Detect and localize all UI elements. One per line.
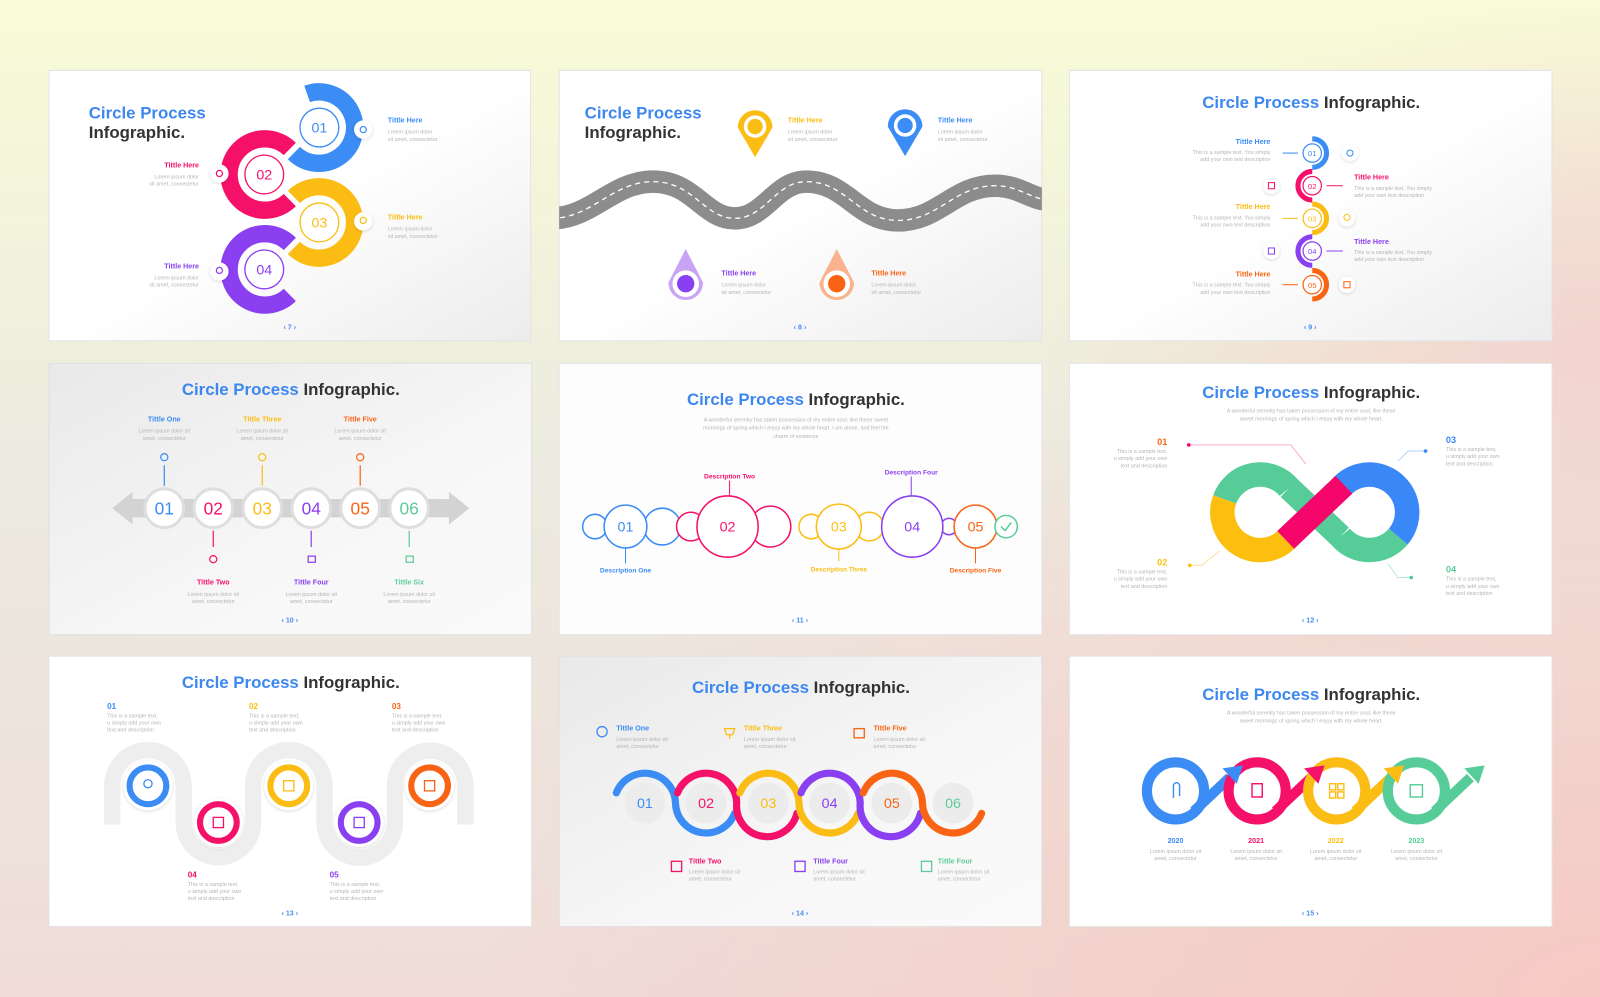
labels: Lorem ipsum dolor sit — [813, 870, 865, 876]
labels: This is a sample text, — [188, 882, 239, 888]
panel: slide 14 waves: 03 — [760, 796, 776, 812]
panel: slide 11 bubble chain — [559, 363, 1042, 635]
title — [585, 103, 702, 142]
panel: slide 12 infinity: This is a sample text, — [1446, 447, 1497, 453]
labels: sit amet, consectetur — [871, 290, 921, 296]
panel: slide 10 arrow timeline: 02 — [204, 498, 223, 518]
labels: Tittle One — [616, 725, 649, 733]
description — [703, 417, 889, 440]
labels: Lorem ipsum dolor sit — [383, 592, 435, 598]
labels: Tittle Here — [1236, 271, 1270, 279]
labels: amet, consectetur — [143, 436, 186, 442]
labels: add your own text description — [1200, 290, 1270, 296]
numbers: 02 — [256, 168, 272, 184]
title: Infographic. — [89, 123, 185, 142]
panel: slide 10 arrow timeline: ‹ 10 › — [281, 616, 299, 624]
numbers: 04 — [256, 263, 272, 279]
title: Circle Process Infographic. — [1202, 383, 1420, 402]
labels: amet, consectetur — [388, 599, 431, 605]
description: charm of existence — [773, 434, 819, 440]
labels: 04 — [188, 871, 197, 880]
labels: sit amet, consectetur — [788, 137, 838, 143]
labels: amet, consectetur — [616, 744, 659, 750]
title: Circle Process Infographic. — [692, 678, 910, 697]
labels: Lorem ipsum dolor sit — [873, 737, 925, 743]
labels: Tittle One — [148, 415, 181, 423]
labels: text and description — [249, 728, 296, 734]
labels: add your own text description — [1200, 157, 1270, 163]
panel: slide 12 infinity: u simply add your own — [1446, 584, 1500, 590]
panel: slide 10 arrow timeline: 05 — [351, 498, 370, 518]
labels: Lorem ipsum dolor — [388, 130, 433, 136]
labels: This is a sample text. You simply — [1354, 186, 1432, 192]
labels: 01 — [107, 702, 117, 711]
panel: slide 12 infinity: 03 — [1446, 435, 1456, 445]
year labels — [1150, 837, 1443, 862]
labels: Tittle Two — [197, 579, 230, 587]
panel: slide 10 arrow timeline: 04 — [302, 498, 321, 518]
title: Circle Process Infographic. — [182, 380, 400, 399]
title: Circle Process Infographic. — [182, 673, 400, 692]
panel: slide 9 vertical chain: 04 — [1308, 247, 1317, 256]
labels: Tittle Here — [1354, 238, 1389, 246]
year labels: amet, consectetur — [1395, 856, 1438, 862]
labels — [149, 116, 438, 289]
year labels: Lorem ipsum dolor sit — [1310, 849, 1362, 855]
icons — [597, 727, 932, 871]
panel: slide 8 road: ‹ 8 › — [794, 324, 807, 332]
panel: slide 7 vertical circles: ‹ 7 › — [283, 324, 297, 332]
description labels: Description Four — [885, 470, 938, 477]
year labels: 2023 — [1408, 837, 1424, 845]
labels: Lorem ipsum dolor — [388, 227, 433, 233]
panel: slide 14 waves: 05 — [884, 796, 900, 812]
panel: slide 15 arrow loops: sweet mornings of spring which I enjoy with my whole heart. — [1240, 718, 1383, 724]
panel: slide 12 infinity: text and description — [1121, 463, 1167, 469]
panel: slide 12 infinity: ‹ 12 › — [1302, 616, 1319, 624]
labels: Lorem ipsum dolor — [154, 175, 199, 181]
labels: add your own text description — [1354, 257, 1424, 263]
description: mornings of spring which I enjoy with my whole heart. I am alone, and feel the — [703, 426, 889, 432]
labels: sit amet, consectetur — [721, 290, 771, 296]
panel: slide 14 waves: 02 — [698, 796, 714, 812]
labels: u simply add your own — [107, 721, 161, 727]
labels: Tittle Two — [689, 857, 722, 865]
panel: slide 12 infinity: text and description — [1446, 591, 1493, 597]
year labels: 2020 — [1168, 837, 1183, 845]
labels: Tittle Four — [813, 857, 848, 865]
labels: amet, consectetur — [938, 877, 981, 883]
title: Circle Process Infographic. — [687, 390, 905, 409]
title: Circle Process — [585, 103, 702, 122]
labels — [616, 725, 990, 883]
labels: This is a sample text. You simply — [1193, 215, 1271, 221]
description labels: Description Three — [811, 566, 867, 573]
panel: slide 11 bubble chain: 04 — [904, 520, 920, 536]
labels: Lorem ipsum dolor sit — [188, 592, 240, 598]
year labels: amet, consectetur — [1154, 856, 1197, 862]
labels: Tittle Here — [164, 262, 199, 270]
labels: Tittle Three — [744, 725, 782, 733]
labels: Lorem ipsum dolor sit — [285, 592, 337, 598]
labels: amet, consectetur — [689, 877, 732, 883]
loops with arrows — [1147, 762, 1470, 819]
panel: slide 11 bubble chain: 01 — [618, 520, 634, 536]
labels: u simply add your own — [392, 721, 445, 727]
labels: amet, consectetur — [339, 436, 382, 442]
labels: amet, consectetur — [744, 744, 787, 750]
labels: This is a sample text. You simply — [1354, 250, 1432, 256]
connectors and icons — [161, 454, 413, 563]
wave arcs — [616, 773, 982, 837]
labels: Lorem ipsum dolor — [154, 276, 199, 282]
description labels: Description Five — [950, 567, 1002, 574]
description labels: Description Two — [704, 474, 755, 481]
panel: slide 12 infinity: u simply add your own — [1114, 577, 1167, 583]
panel: slide 14 waves — [559, 656, 1042, 927]
panel: slide 12 infinity: text and description — [1121, 584, 1167, 590]
labels: Tittle Six — [394, 579, 424, 587]
labels: Tittle Here — [1236, 138, 1270, 146]
panel: slide 12 infinity: 04 — [1446, 564, 1457, 574]
icons — [1263, 145, 1358, 293]
numbers: 01 — [311, 121, 327, 137]
year labels: amet, consectetur — [1314, 856, 1357, 862]
labels: amet, consectetur — [241, 436, 284, 442]
panel: slide 8 road — [551, 70, 1051, 341]
labels — [107, 702, 445, 902]
labels: text and description — [188, 896, 235, 902]
infinity — [1222, 475, 1407, 550]
labels: Tittle Here — [938, 116, 973, 124]
panel: slide 12 infinity: This is a sample text, — [1446, 577, 1497, 583]
labels: Tittle Here — [788, 116, 823, 124]
labels — [139, 415, 435, 605]
panel: slide 9 vertical chain: 05 — [1308, 281, 1316, 290]
description: A wonderful serenity has taken possession of my entire soul, like these sweet — [704, 417, 889, 423]
labels: Lorem ipsum dolor sit — [689, 870, 741, 876]
title: Circle Process Infographic. — [1202, 93, 1420, 112]
labels: Tittle Here — [1236, 203, 1270, 211]
numbers — [256, 121, 327, 279]
labels: 02 — [249, 702, 259, 711]
description labels: Description One — [600, 567, 651, 574]
labels: u simply add your own — [188, 889, 241, 895]
panel: slide 12 infinity: text and description — [1446, 461, 1493, 467]
panel: slide 9 vertical chain: 01 — [1308, 149, 1316, 158]
bubble chain — [583, 496, 1017, 557]
panel: slide 11 bubble chain: 05 — [968, 520, 984, 536]
panel: slide 10 arrow timeline: 06 — [400, 498, 419, 518]
labels: u simply add your own — [249, 721, 303, 727]
labels: sit amet, consectetur — [938, 137, 988, 143]
labels: sit amet, consectetur — [149, 182, 199, 188]
labels — [1193, 138, 1432, 296]
labels: Tittle Here — [871, 270, 906, 278]
labels — [721, 116, 988, 296]
labels: Tittle Five — [344, 415, 377, 423]
panel: slide 12 infinity: This is a sample text, — [1117, 570, 1168, 576]
labels: Tittle Here — [1354, 174, 1389, 182]
labels: amet, consectetur — [192, 599, 235, 605]
labels: sit amet, consectetur — [388, 137, 438, 143]
labels: text and description — [330, 896, 376, 902]
labels: add your own text description — [1354, 193, 1424, 199]
labels: Lorem ipsum dolor — [721, 283, 766, 289]
title: Circle Process Infographic. — [1202, 685, 1420, 704]
panel: slide 12 infinity: sweet mornings of spring which I enjoy with my whole heart. — [1240, 416, 1383, 422]
circles — [145, 489, 429, 528]
panel: slide 7 vertical circles — [49, 70, 531, 341]
ring chain — [229, 92, 355, 305]
labels: Lorem ipsum dolor — [788, 130, 833, 136]
labels: Lorem ipsum dolor — [871, 283, 916, 289]
labels: This is a sample text. You simply — [1193, 283, 1271, 289]
panel: slide 14 waves: 04 — [822, 796, 838, 812]
panel: slide 12 infinity: This is a sample text, — [1117, 449, 1168, 455]
arrow band — [112, 492, 469, 525]
panel: slide 11 bubble chain: 02 — [720, 520, 736, 536]
gray circles — [624, 783, 973, 824]
panel: slide 9 vertical chain: 03 — [1308, 214, 1316, 223]
labels: Lorem ipsum dolor — [938, 130, 983, 136]
pins — [668, 109, 922, 300]
labels: Lorem ipsum dolor sit — [744, 737, 796, 743]
panel: slide 10 arrow timeline: 03 — [253, 498, 272, 518]
panel: slide 14 waves: 01 — [637, 796, 653, 812]
panel: slide 12 infinity: 01 — [1157, 437, 1167, 447]
callouts — [1189, 445, 1426, 578]
chain — [1298, 139, 1327, 299]
road — [551, 182, 1051, 220]
labels: Lorem ipsum dolor sit — [334, 429, 386, 435]
panel: slide 10 arrow timeline — [49, 363, 532, 635]
panel: slide 9 vertical chain: ‹ 9 › — [1304, 324, 1317, 332]
labels: Lorem ipsum dolor sit — [938, 870, 990, 876]
panel: slide 14 waves: 06 — [945, 796, 961, 812]
labels: Lorem ipsum dolor sit — [616, 737, 668, 743]
year labels: 2022 — [1328, 837, 1344, 845]
panel: slide 11 bubble chain: ‹ 11 › — [792, 616, 809, 624]
labels: Tittle Here — [388, 116, 423, 124]
labels: 05 — [330, 871, 339, 880]
labels: 03 — [392, 702, 401, 711]
labels: This is a sample text, — [330, 882, 381, 888]
labels: Tittle Five — [873, 725, 907, 733]
year labels: 2021 — [1248, 837, 1264, 845]
labels: This is a sample text, — [249, 713, 300, 719]
panel: slide 12 infinity: 02 — [1157, 557, 1167, 567]
panel: slide 15 arrow loops: A wonderful serenity has taken possession of my entire soul, like these — [1227, 710, 1396, 716]
panel: slide 9 vertical chain: 02 — [1308, 182, 1316, 191]
labels: Tittle Four — [294, 579, 329, 587]
labels: Tittle Here — [164, 161, 199, 169]
icons — [210, 120, 372, 281]
labels: text and description — [107, 728, 154, 734]
year labels: amet, consectetur — [1235, 856, 1278, 862]
panel: slide 15 arrow loops — [1069, 656, 1552, 927]
panel: slide 11 bubble chain: 03 — [831, 520, 847, 536]
panel: slide 12 infinity: u simply add your own — [1114, 456, 1167, 462]
year labels: Lorem ipsum dolor sit — [1150, 849, 1202, 855]
panel: slide 12 infinity: A wonderful serenity has taken possession of my entire soul, like these — [1227, 408, 1396, 414]
labels: Tittle Here — [388, 213, 423, 221]
labels: amet, consectetur — [813, 877, 856, 883]
labels: Tittle Three — [243, 415, 281, 423]
labels: text and description — [392, 728, 439, 734]
labels: sit amet, consectetur — [149, 283, 199, 289]
panel: slide 13 serpentine: ‹ 13 › — [281, 909, 299, 917]
labels: This is a sample text, — [392, 713, 443, 719]
year labels: Lorem ipsum dolor sit — [1230, 849, 1282, 855]
title — [89, 103, 206, 142]
panel: slide 15 arrow loops: ‹ 15 › — [1302, 909, 1319, 917]
labels: amet, consectetur — [290, 599, 333, 605]
labels: This is a sample text. You simply — [1193, 150, 1271, 156]
title: Infographic. — [585, 123, 681, 142]
year labels: Lorem ipsum dolor sit — [1391, 849, 1443, 855]
panel: slide 14 waves: ‹ 14 › — [792, 909, 809, 917]
labels: u simply add your own — [330, 889, 383, 895]
panel: slide 13 serpentine — [49, 656, 532, 927]
panel: slide 9 vertical chain — [1069, 70, 1552, 341]
labels: Tittle Four — [938, 857, 973, 865]
labels: add your own text description — [1200, 223, 1270, 229]
panel: slide 12 infinity: u simply add your own — [1446, 454, 1500, 460]
labels: amet, consectetur — [873, 744, 917, 750]
track — [112, 750, 465, 858]
numbers: 03 — [311, 216, 327, 232]
labels: Lorem ipsum dolor sit — [139, 429, 191, 435]
panel: slide 12 infinity — [1069, 363, 1552, 635]
title: Circle Process — [89, 103, 206, 122]
panel: slide 10 arrow timeline: 01 — [155, 498, 174, 518]
labels: Lorem ipsum dolor sit — [236, 429, 289, 435]
labels: Tittle Here — [721, 270, 756, 278]
circles — [123, 761, 454, 847]
labels: This is a sample text, — [107, 713, 158, 719]
labels: sit amet, consectetur — [388, 234, 438, 240]
description labels — [600, 470, 1002, 574]
